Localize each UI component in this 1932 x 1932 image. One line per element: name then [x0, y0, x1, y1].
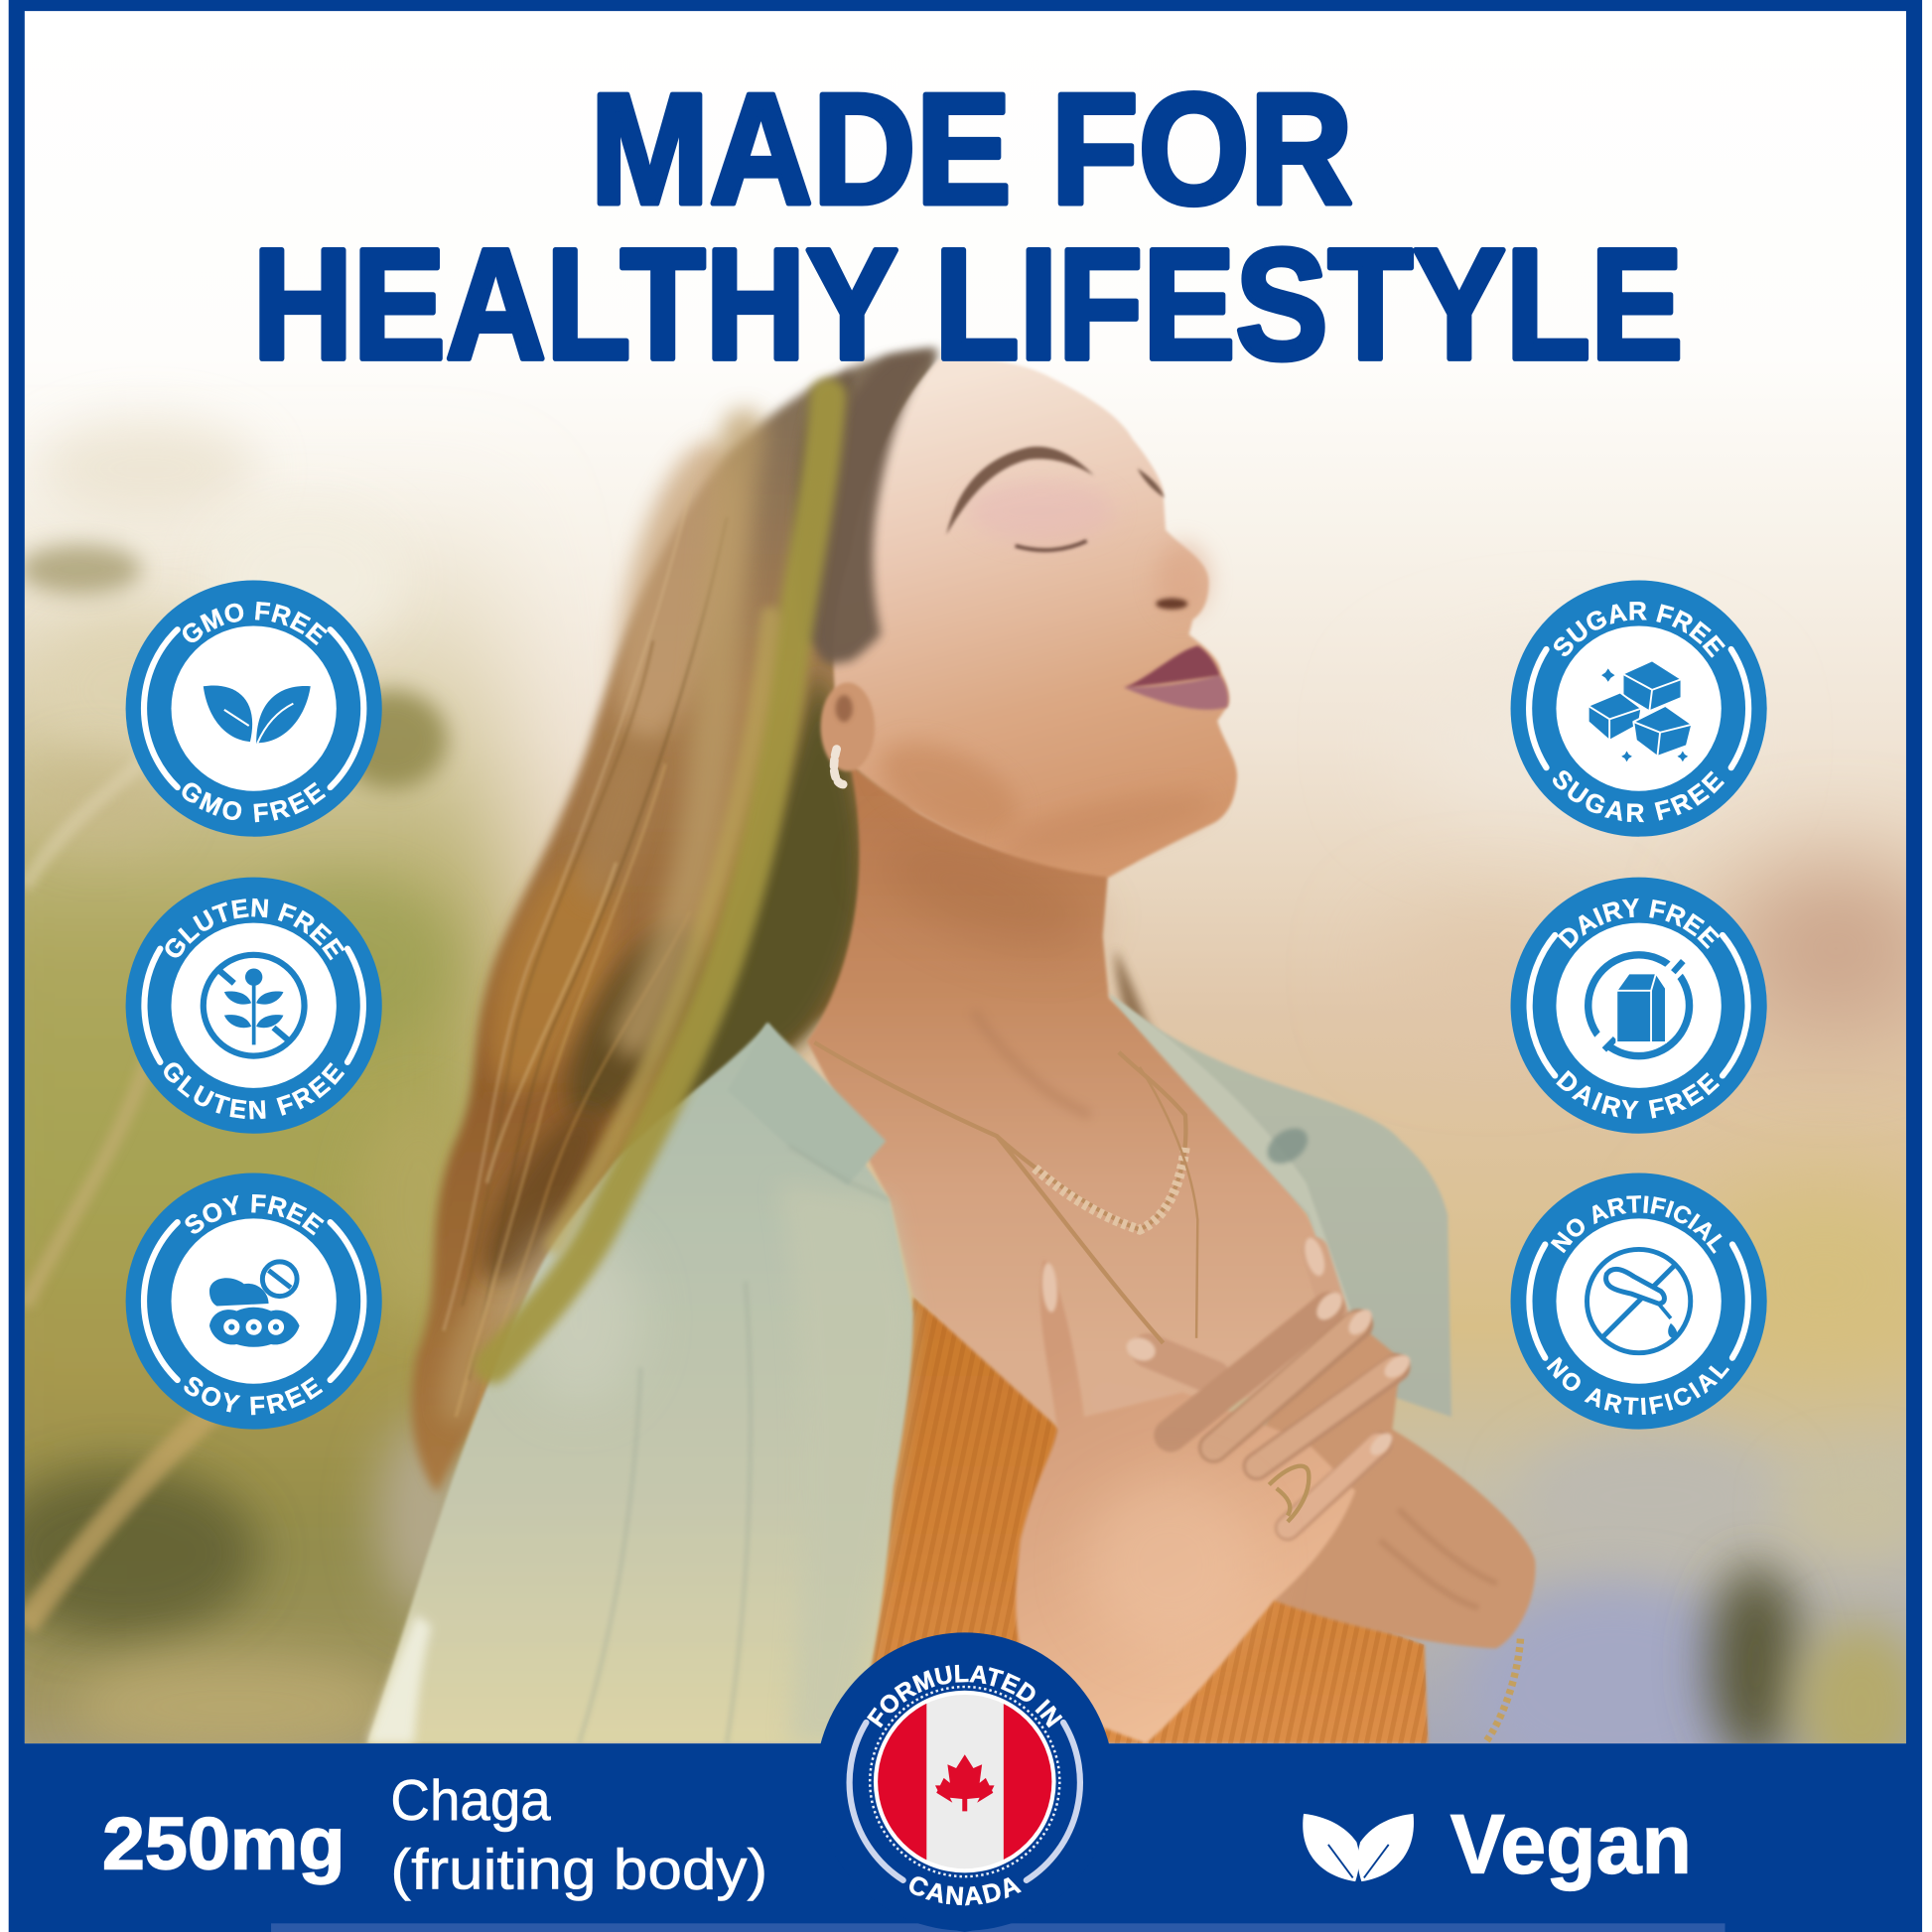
- side arcs: [144, 949, 363, 1062]
- hair over forehead: [809, 349, 937, 664]
- fingers: [1171, 1309, 1396, 1528]
- face: [821, 358, 1237, 878]
- badge label: [1546, 596, 1731, 828]
- seal text: CANADA: [903, 1868, 1026, 1911]
- background photo scene: [24, 340, 1906, 1743]
- side arcs: [1529, 1244, 1748, 1358]
- woman: [367, 348, 1536, 1743]
- badge: soy free: [126, 1173, 382, 1430]
- badge: no artificial: [1511, 1173, 1767, 1430]
- dark hair beside neck: [679, 667, 861, 1102]
- side arcs: [144, 629, 363, 787]
- badge label: GMO FREE: [183, 602, 328, 645]
- foreground grass streaks: [492, 397, 828, 1365]
- seal: formulated in Canada: [816, 1632, 1114, 1931]
- hair mass: [412, 348, 1171, 1493]
- seal dome: [816, 1632, 1114, 1931]
- bottom strip: [271, 1923, 1725, 1932]
- badge label: GLUTEN FREE: [165, 897, 345, 961]
- eyebrows: [946, 447, 1165, 535]
- orange ribbed top: [854, 1297, 1428, 1743]
- badge label: [1541, 1191, 1736, 1421]
- icon: crossed-out milk carton: [1588, 955, 1690, 1056]
- icon: maple leaf: [935, 1754, 995, 1811]
- right shirt panel: [1108, 993, 1451, 1417]
- nostril: [1156, 599, 1187, 610]
- dotted ring: [870, 1687, 1059, 1876]
- left shirt panel: [367, 1023, 913, 1743]
- badge: GMO free: [126, 581, 382, 837]
- badge label: DAIRY FREE: [1556, 1070, 1720, 1119]
- flag: [863, 1688, 1077, 1872]
- badge label: [156, 893, 351, 1125]
- badge label: SOY FREE: [185, 1194, 325, 1235]
- label: chaga: Chaga: [390, 1769, 551, 1833]
- badge: sugar free: [1511, 581, 1767, 837]
- closed eye: [1016, 541, 1087, 550]
- seal text: [863, 1661, 1066, 1911]
- icon: vegan leaves: [1303, 1814, 1414, 1881]
- icon: crossed-out wheat: [204, 955, 305, 1056]
- label: vegan: Vegan: [1450, 1797, 1692, 1890]
- front hand: [1016, 1235, 1414, 1743]
- icon: crossed-out dropper: [1587, 1249, 1691, 1353]
- left foliage: [0, 419, 505, 1787]
- bracelet: [1484, 1639, 1520, 1743]
- seal outer arcs: [850, 1723, 1080, 1880]
- badge: gluten free: [126, 878, 382, 1134]
- hair strands: [444, 492, 727, 1442]
- badge label: GLUTEN FREE: [164, 1062, 345, 1120]
- side arcs: [144, 1222, 363, 1380]
- back hand: [1106, 1251, 1536, 1649]
- collar right shading: [1108, 993, 1380, 1392]
- necklaces: [814, 1042, 1197, 1343]
- icon: leaves: [204, 685, 311, 743]
- badge: dairy free: [1511, 878, 1767, 1134]
- icon: soybean pod: [209, 1262, 300, 1347]
- badge label: GMO FREE: [183, 782, 326, 822]
- ring: [1269, 1466, 1309, 1522]
- lips: [1124, 645, 1228, 710]
- label: chaga: [390, 1769, 767, 1902]
- right blurred landscape: [1469, 759, 1906, 1743]
- icon: sugar cubes: [1588, 660, 1692, 761]
- label: chaga: (fruiting body): [390, 1839, 767, 1902]
- badge label: [1551, 893, 1726, 1125]
- badge label: [178, 1188, 330, 1421]
- fingernails: [1040, 1235, 1414, 1458]
- badge label: SOY FREE: [184, 1376, 324, 1416]
- seal text: FORMULATED IN: [863, 1661, 1066, 1732]
- stat: 250mg: 250mg: [102, 1803, 345, 1885]
- side arcs: [1530, 935, 1748, 1075]
- title: [252, 61, 1683, 392]
- badge label: [175, 596, 333, 828]
- side arcs: [1529, 649, 1748, 767]
- badge label: NO ARTIFICIAL: [1551, 1195, 1722, 1254]
- back fingers: [1149, 1350, 1213, 1378]
- back thumb: [1314, 1251, 1338, 1324]
- title: HEALTHY LIFESTYLE: [252, 215, 1683, 392]
- title: MADE FOR: [590, 61, 1353, 237]
- badge label: NO ARTIFICIAL: [1541, 1353, 1736, 1421]
- badge label: SUGAR FREE: [1554, 602, 1725, 658]
- neck and chest skin: [807, 763, 1355, 1430]
- badge label: DAIRY FREE: [1558, 897, 1720, 949]
- ear and earring: [821, 683, 875, 784]
- badge label: SUGAR FREE: [1553, 770, 1725, 822]
